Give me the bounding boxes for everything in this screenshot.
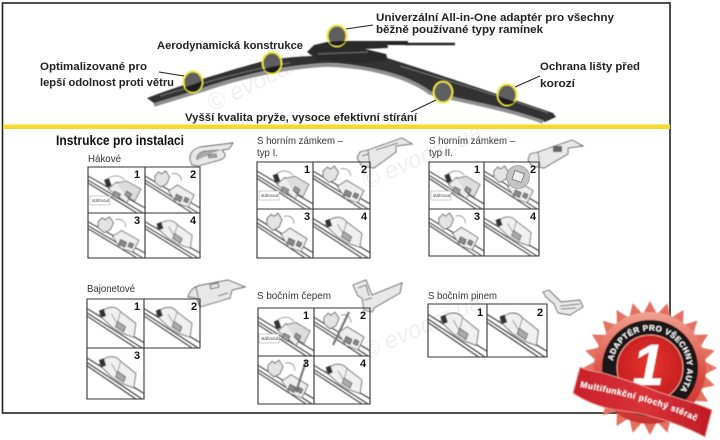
panel: S horním zámkem typ II: 3 (474, 211, 480, 223)
panel: S bočním čepem: stáhnout (261, 336, 279, 341)
wiper arm (340, 41, 408, 45)
panel: Bajonetové: 1 (134, 301, 140, 313)
detail lens (506, 166, 530, 188)
panel: S bočním čepem: S bočním čepem (257, 290, 331, 302)
callout: corrosion: Ochrana lišty před (540, 61, 640, 73)
badge numeral: 1 (632, 333, 664, 398)
watermarks: © evocar.ua (357, 288, 486, 365)
callout: wind resistance: Optimalizované pro (40, 61, 147, 73)
panel: Bajonetové: 2 (191, 301, 197, 313)
panel: Hákové: 2 (190, 169, 196, 181)
panel: S bočním pinem: 2 (537, 307, 543, 319)
panel: S bočním pinem (428, 290, 583, 357)
callout: adapter: Univerzální All-in-One adaptér pro všechny (376, 12, 615, 24)
blade body (147, 56, 556, 122)
panel: S bočním pinem: S bočním pinem (428, 290, 497, 302)
panel: Hákové: Hákové (88, 153, 121, 165)
blade lower rubber strip (154, 65, 543, 122)
adapter mount (307, 42, 388, 63)
panel: Hákové: 1 (134, 169, 140, 181)
panel: S horním zámkem typ II: stáhnout (433, 193, 451, 198)
panel: Hákové (88, 143, 233, 258)
yellow divider (3, 124, 670, 129)
panel: S horním zámkem typ I (257, 135, 412, 258)
panel: S bočním čepem: 3 (303, 358, 309, 370)
panel: Bajonetové: 3 (134, 350, 140, 362)
heading: installation instructions: Instrukce pro instalaci (56, 133, 184, 148)
panel: S bočním čepem: 1 (303, 310, 309, 322)
panel: Hákové: 4 (190, 215, 197, 227)
panel: S bočním čepem: 2 (360, 310, 366, 322)
icon: top lock adapter II (528, 140, 583, 168)
icon: side pin adapter (353, 280, 402, 312)
icon: hook adapter (190, 143, 233, 166)
panel: S horním zámkem typ II (429, 135, 583, 256)
panel: S horním zámkem typ I: 2 (361, 164, 367, 176)
panel: S horním zámkem typ II: 2 (530, 164, 536, 176)
callout: rubber quality: Vyšší kvalita pryže, vysoce efektivní stírání (185, 112, 418, 124)
ribbon text: Multifunkční plochý stěrač (580, 380, 698, 422)
callout: wind resistance line 2: lepší odolnost proti větru (40, 77, 174, 89)
icon: side pin plug (543, 290, 583, 315)
panel: S horním zámkem typ I: typ I. (257, 147, 278, 159)
panel: S bočním pinem: 1 (477, 307, 483, 319)
callout: aerodynamics: Aerodynamická konstrukce (157, 40, 303, 52)
leader lines (159, 25, 540, 112)
watermarks: © evocar.ua (203, 37, 330, 117)
panel: S horním zámkem typ I: 4 (361, 211, 368, 223)
watermarks: © evocar.ua (357, 118, 486, 195)
panel: Bajonetové: Bajonetové (87, 283, 135, 295)
panel: S horním zámkem typ I: 3 (304, 211, 310, 223)
panel: S horním zámkem typ II: typ II. (429, 147, 453, 159)
panel: S horním zámkem typ II: S horním zámkem – (429, 135, 515, 147)
callout circles (184, 26, 516, 106)
ribbon (573, 367, 712, 437)
badge ring text: ADAPTÉR PRO VŠECHNY AUTA (607, 324, 694, 392)
panel: S horním zámkem typ I: S horním zámkem – (257, 135, 343, 147)
wiper blade illustration (147, 42, 556, 122)
panel: Hákové: stáhnout (92, 198, 110, 203)
panel: S bočním čepem: 4 (360, 358, 367, 370)
panel: Hákové: 3 (134, 215, 140, 227)
icon: bayonet adapter (188, 280, 245, 307)
callout: corrosion line 2: korozí (540, 78, 576, 90)
watermarks (203, 37, 486, 365)
panel: S horním zámkem typ I: 1 (304, 164, 310, 176)
panel: S horním zámkem typ I: stáhnout (261, 193, 279, 198)
panel: S horním zámkem typ II: 1 (474, 164, 480, 176)
panel: S bočním čepem (257, 280, 402, 404)
badge spikes (583, 301, 717, 435)
panel: S horním zámkem typ II: 4 (530, 211, 537, 223)
panel: Bajonetové (87, 280, 245, 399)
badge: universal adapter (572, 300, 718, 438)
callout: adapter line 2: běžně používané typy ramínek (376, 24, 544, 36)
icon: top lock adapter (357, 138, 412, 168)
